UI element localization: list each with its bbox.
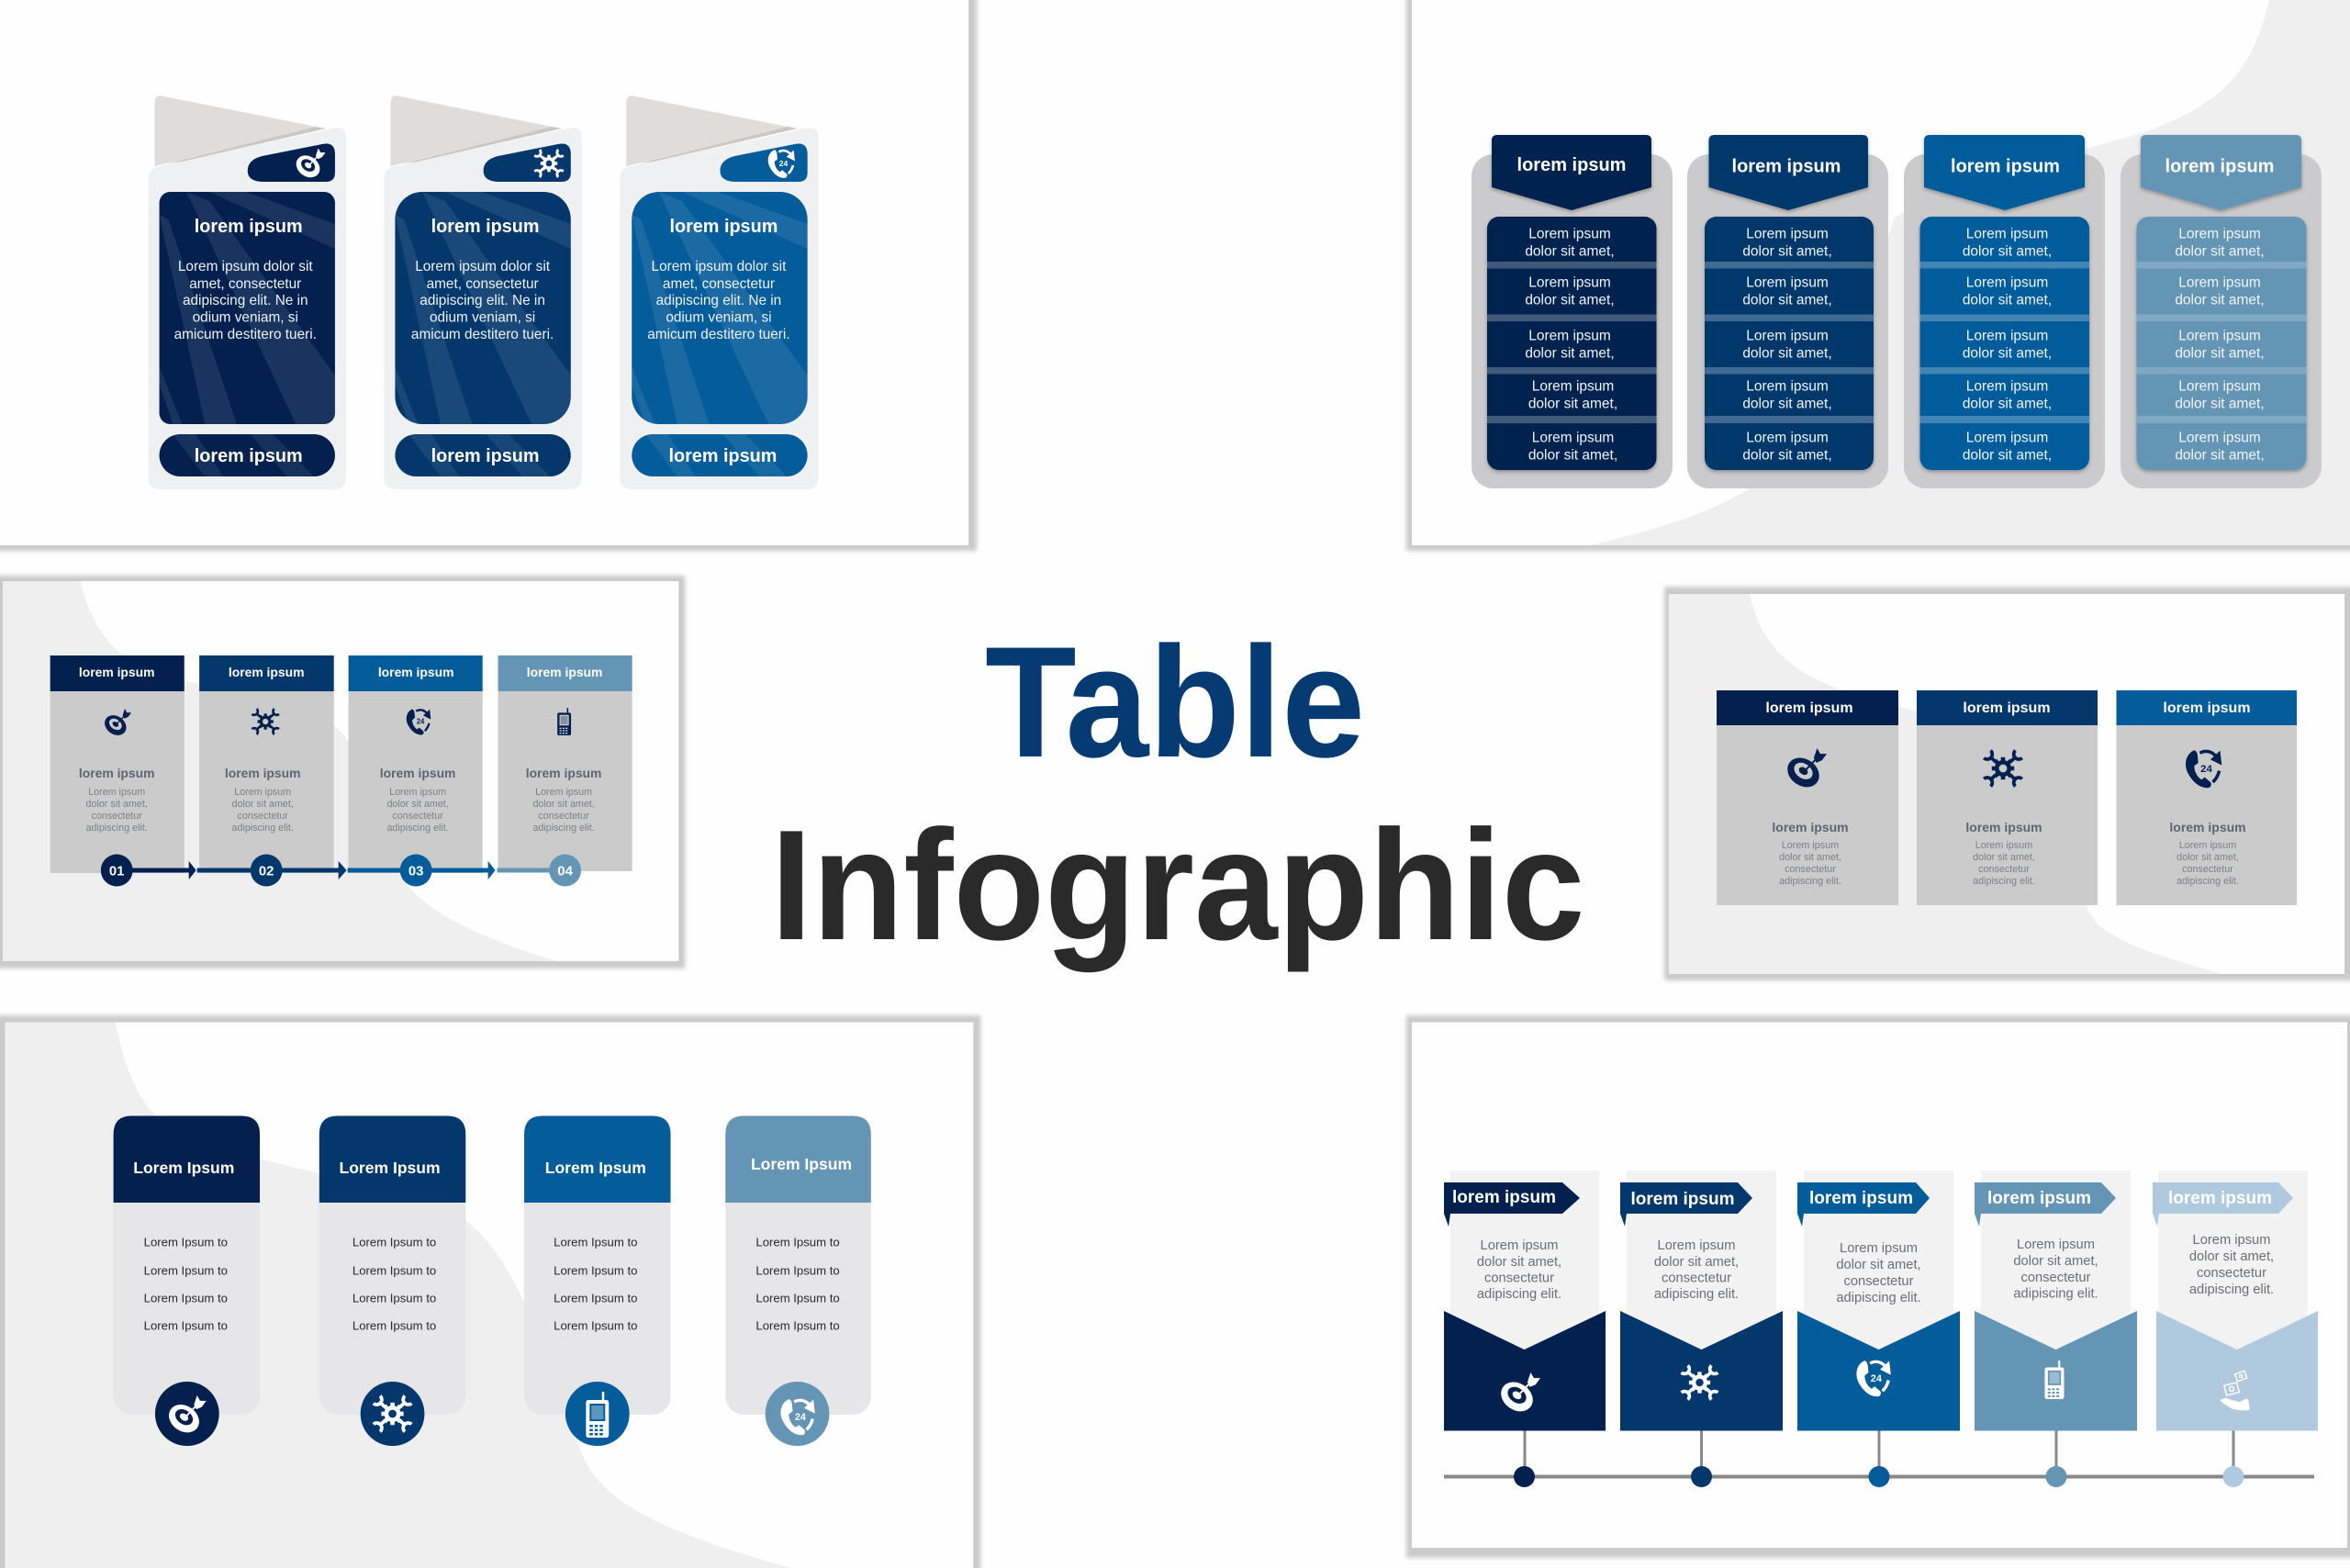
step 4: lorem ipsum — [527, 665, 602, 679]
column 1: lorem ipsum — [1765, 700, 1853, 716]
panel: three cards with fold tabs — [0, 0, 977, 551]
column 2: lorem ipsum — [1963, 700, 2051, 716]
card 3 mid blue: lorem ipsum — [669, 217, 778, 237]
step 1: Lorem ipsum — [1481, 1238, 1558, 1253]
step 5: consectetur — [2197, 1266, 2266, 1281]
column 2 — [1687, 135, 1888, 488]
step 4: Lorem ipsum — [535, 787, 592, 798]
step 2 — [199, 655, 334, 873]
column 1: adipiscing elit. — [1779, 876, 1841, 887]
title: Table — [985, 614, 1365, 790]
step 1 — [50, 655, 185, 873]
column 1: Lorem ipsum — [1528, 329, 1611, 343]
column 4: Lorem ipsum — [2178, 378, 2261, 395]
card 2: Lorem Ipsum to — [352, 1263, 436, 1278]
panel: numbered four-step table — [0, 576, 685, 969]
column 2: dolor sit amet, — [1742, 244, 1832, 259]
column 1: lorem ipsum — [1517, 155, 1626, 175]
column 4: Lorem ipsum — [2178, 329, 2261, 343]
column 3: Lorem ipsum — [1966, 329, 2048, 343]
column 1 — [1472, 135, 1673, 488]
column 3: lorem ipsum — [2163, 700, 2251, 716]
card 2: Lorem Ipsum to — [352, 1291, 436, 1305]
column 3: Lorem ipsum — [2179, 840, 2236, 851]
column 2: adipiscing elit. — [1973, 876, 2035, 887]
card 4: Lorem Ipsum to — [755, 1263, 840, 1278]
step 1: consectetur — [91, 811, 142, 822]
step 1 — [1444, 1170, 1606, 1430]
card 3 mid blue: 24 — [779, 159, 788, 168]
column 4: Lorem ipsum — [2178, 275, 2261, 290]
column 1: Lorem ipsum — [1532, 430, 1614, 446]
column 4: dolor sit amet, — [2175, 448, 2265, 463]
step 4: adipiscing elit. — [532, 823, 595, 834]
card 2 dark blue: odium veniam, si — [430, 309, 535, 326]
card 1 navy: odium veniam, si — [193, 309, 298, 326]
column 4: lorem ipsum — [2165, 156, 2274, 176]
column 2: consectetur — [1978, 864, 2030, 875]
card 1 navy — [149, 95, 346, 489]
step 3: lorem ipsum — [380, 766, 455, 780]
step 2: consectetur — [237, 811, 288, 822]
column 3: Lorem ipsum — [1966, 226, 2048, 242]
column 2: Lorem ipsum — [1746, 275, 1829, 290]
step 3: dolor sit amet, — [386, 799, 449, 810]
card 2 — [319, 1116, 465, 1446]
card 2 dark blue: amet, consectetur — [427, 276, 539, 292]
column 3: consectetur — [2182, 864, 2233, 875]
step 2: dolor sit amet, — [1654, 1255, 1739, 1270]
card 1 — [114, 1116, 260, 1446]
column 3: Lorem ipsum — [1966, 378, 2048, 395]
step 3: consectetur — [392, 811, 443, 822]
card 1: Lorem Ipsum to — [144, 1263, 228, 1278]
column 3 — [2117, 690, 2297, 905]
column 4: dolor sit amet, — [2175, 345, 2265, 362]
card 4: Lorem Ipsum — [751, 1155, 852, 1173]
column 1: Lorem ipsum — [1528, 275, 1611, 290]
column 3 — [1904, 135, 2105, 488]
column 1: Lorem ipsum — [1782, 840, 1839, 851]
column 2: Lorem ipsum — [1746, 378, 1829, 395]
card 2: Lorem Ipsum to — [352, 1235, 436, 1249]
card 3 mid blue: odium veniam, si — [666, 309, 772, 326]
column 1: dolor sit amet, — [1528, 397, 1617, 411]
column 2 — [1917, 690, 2098, 905]
card 3: Lorem Ipsum to — [554, 1291, 637, 1305]
step 2: consectetur — [1662, 1271, 1731, 1285]
column 2: Lorem ipsum — [1975, 840, 2032, 851]
step 3: Lorem ipsum — [1840, 1241, 1918, 1256]
step 5: adipiscing elit. — [2189, 1282, 2274, 1297]
card 1: Lorem Ipsum — [133, 1159, 234, 1177]
step 2: adipiscing elit. — [1654, 1287, 1739, 1302]
column 3: 24 — [2200, 764, 2213, 775]
card 2: Lorem Ipsum to — [352, 1318, 436, 1333]
column 1: consectetur — [1785, 864, 1836, 875]
column 1: dolor sit amet, — [1528, 448, 1617, 463]
card 1: Lorem Ipsum to — [144, 1291, 228, 1305]
card 1 navy: amicum destitero tueri. — [174, 327, 317, 342]
step 4: Lorem ipsum — [2017, 1238, 2095, 1252]
card 3: Lorem Ipsum — [545, 1159, 646, 1177]
step 4: dolor sit amet, — [2013, 1254, 2098, 1269]
step 2: Lorem ipsum — [1658, 1238, 1735, 1253]
step 4: lorem ipsum — [526, 766, 601, 780]
card 4: Lorem Ipsum to — [755, 1291, 840, 1305]
card 3 mid blue — [620, 95, 819, 489]
step 1: lorem ipsum — [1452, 1188, 1556, 1207]
title — [771, 614, 1584, 973]
card 3 mid blue: lorem ipsum — [668, 446, 777, 466]
column 2: dolor sit amet, — [1742, 397, 1832, 411]
column 3: lorem ipsum — [1951, 156, 2060, 176]
card 2: Lorem Ipsum — [340, 1159, 441, 1177]
card 2 dark blue: Lorem ipsum dolor sit — [415, 259, 551, 274]
numbered arrow timeline: 02 — [259, 863, 274, 879]
column 3: dolor sit amet, — [1963, 345, 2052, 362]
step 4: consectetur — [2021, 1271, 2091, 1285]
step 5: Lorem ipsum — [2193, 1233, 2270, 1248]
step 4 — [498, 655, 632, 871]
card 2 dark blue: lorem ipsum — [431, 217, 540, 237]
column 3: lorem ipsum — [2169, 820, 2246, 834]
card 2 dark blue: lorem ipsum — [431, 446, 540, 466]
card 1 navy: lorem ipsum — [195, 217, 303, 237]
column 2: Lorem ipsum — [1746, 430, 1829, 446]
timeline axis — [1444, 1430, 2314, 1487]
step 3 — [349, 655, 483, 873]
card 2 dark blue: adipiscing elit. Ne in — [420, 293, 545, 308]
step 1: adipiscing elit. — [86, 823, 148, 834]
column 1: Lorem ipsum — [1528, 226, 1611, 242]
numbered arrow timeline: 01 — [109, 863, 124, 879]
column 1: dolor sit amet, — [1779, 852, 1841, 863]
step 4: consectetur — [538, 811, 589, 822]
card 1 navy: adipiscing elit. Ne in — [183, 293, 308, 308]
column 3: dolor sit amet, — [1963, 244, 2052, 259]
step 3: adipiscing elit. — [1836, 1291, 1921, 1305]
card 1: Lorem Ipsum to — [144, 1318, 228, 1333]
step 4: dolor sit amet, — [532, 799, 595, 810]
panel: four columns with chevron headers — [1406, 0, 2350, 551]
column 4 — [2121, 135, 2322, 488]
card 3 mid blue: Lorem ipsum dolor sit — [652, 259, 787, 274]
step 3: adipiscing elit. — [386, 823, 449, 834]
step 2: dolor sit amet, — [232, 799, 294, 810]
column 4: dolor sit amet, — [2175, 292, 2265, 308]
column 1: lorem ipsum — [1772, 820, 1849, 834]
card 4 — [725, 1116, 871, 1446]
step 1: consectetur — [1484, 1271, 1554, 1285]
step 1: lorem ipsum — [79, 766, 154, 780]
step 1: Lorem ipsum — [88, 787, 145, 798]
card 4: Lorem Ipsum to — [755, 1235, 840, 1249]
card 1 navy: lorem ipsum — [195, 446, 303, 466]
column 3: Lorem ipsum — [1966, 430, 2048, 446]
column 1: dolor sit amet, — [1525, 345, 1615, 362]
card 1 navy: Lorem ipsum dolor sit — [178, 259, 313, 274]
column 4: dolor sit amet, — [2175, 397, 2265, 411]
column 3: Lorem ipsum — [1966, 275, 2048, 290]
numbered arrow timeline — [101, 854, 581, 887]
step 1: dolor sit amet, — [1477, 1255, 1561, 1270]
step 2: Lorem ipsum — [234, 787, 291, 798]
column 1 — [1717, 690, 1898, 905]
step 2: lorem ipsum — [229, 665, 304, 679]
card 4: Lorem Ipsum to — [755, 1318, 840, 1333]
step 3: lorem ipsum — [1809, 1189, 1913, 1208]
card 1: Lorem Ipsum to — [144, 1235, 228, 1249]
step 1: lorem ipsum — [79, 665, 154, 679]
column 2: Lorem ipsum — [1746, 226, 1829, 242]
card 3 — [524, 1116, 671, 1446]
step 5: dolor sit amet, — [2189, 1249, 2274, 1264]
step 5: lorem ipsum — [2168, 1189, 2272, 1208]
column 3: dolor sit amet, — [1963, 448, 2052, 463]
card 3: Lorem Ipsum to — [554, 1318, 637, 1333]
step 3: 24 — [417, 718, 425, 726]
column 3: dolor sit amet, — [1963, 397, 2052, 411]
step 1: adipiscing elit. — [1477, 1287, 1561, 1302]
numbered arrow timeline: 04 — [557, 863, 574, 879]
column 4: Lorem ipsum — [2178, 226, 2261, 242]
column 3: dolor sit amet, — [1963, 292, 2052, 308]
card 2 dark blue: amicum destitero tueri. — [411, 327, 554, 342]
panel: three-column table with icons — [1664, 587, 2350, 980]
column 3: adipiscing elit. — [2177, 876, 2239, 887]
column 2: dolor sit amet, — [1742, 448, 1832, 463]
column 2: dolor sit amet, — [1742, 345, 1832, 362]
step 2: lorem ipsum — [1630, 1190, 1734, 1209]
column 2: dolor sit amet, — [1742, 292, 1832, 308]
step 2: adipiscing elit. — [232, 823, 294, 834]
card 4: 24 — [795, 1412, 806, 1423]
column 3: dolor sit amet, — [2177, 852, 2239, 863]
step 2: lorem ipsum — [225, 766, 300, 780]
card 3: Lorem Ipsum to — [554, 1263, 637, 1278]
column 4: dolor sit amet, — [2175, 244, 2265, 259]
step 1: dolor sit amet, — [86, 799, 148, 810]
column 1: Lorem ipsum — [1532, 378, 1614, 395]
card 3 mid blue: adipiscing elit. Ne in — [656, 293, 781, 308]
step 3: Lorem ipsum — [389, 787, 446, 798]
column 1: dolor sit amet, — [1525, 292, 1615, 308]
column 1: dolor sit amet, — [1525, 244, 1615, 259]
step 3: 24 — [1871, 1373, 1882, 1384]
step 3: lorem ipsum — [378, 665, 453, 679]
step 4 — [1975, 1170, 2137, 1430]
step 4: lorem ipsum — [1987, 1189, 2091, 1208]
column 2: Lorem ipsum — [1746, 329, 1829, 343]
panel: five-step timeline — [1406, 1015, 2350, 1558]
step 4: adipiscing elit. — [2013, 1287, 2098, 1302]
step 3: consectetur — [1844, 1274, 1914, 1289]
column 2: lorem ipsum — [1732, 156, 1841, 176]
panel: four rounded cards with circle icons — [0, 1015, 980, 1568]
column 4: Lorem ipsum — [2178, 430, 2261, 446]
card 3 mid blue: amet, consectetur — [663, 276, 775, 292]
card 3 mid blue: amicum destitero tueri. — [647, 327, 790, 342]
column 2: lorem ipsum — [1965, 820, 2042, 834]
card 1 navy: amet, consectetur — [189, 276, 301, 292]
step 2 — [1620, 1170, 1783, 1430]
card 3: Lorem Ipsum to — [554, 1235, 637, 1249]
numbered arrow timeline: 03 — [408, 863, 423, 879]
step 3 — [1797, 1170, 1960, 1430]
step 3: dolor sit amet, — [1836, 1258, 1921, 1272]
card 2 dark blue — [384, 95, 582, 489]
title: Infographic — [771, 798, 1584, 973]
column 2: dolor sit amet, — [1973, 852, 2035, 863]
step 5 — [2153, 1170, 2318, 1430]
